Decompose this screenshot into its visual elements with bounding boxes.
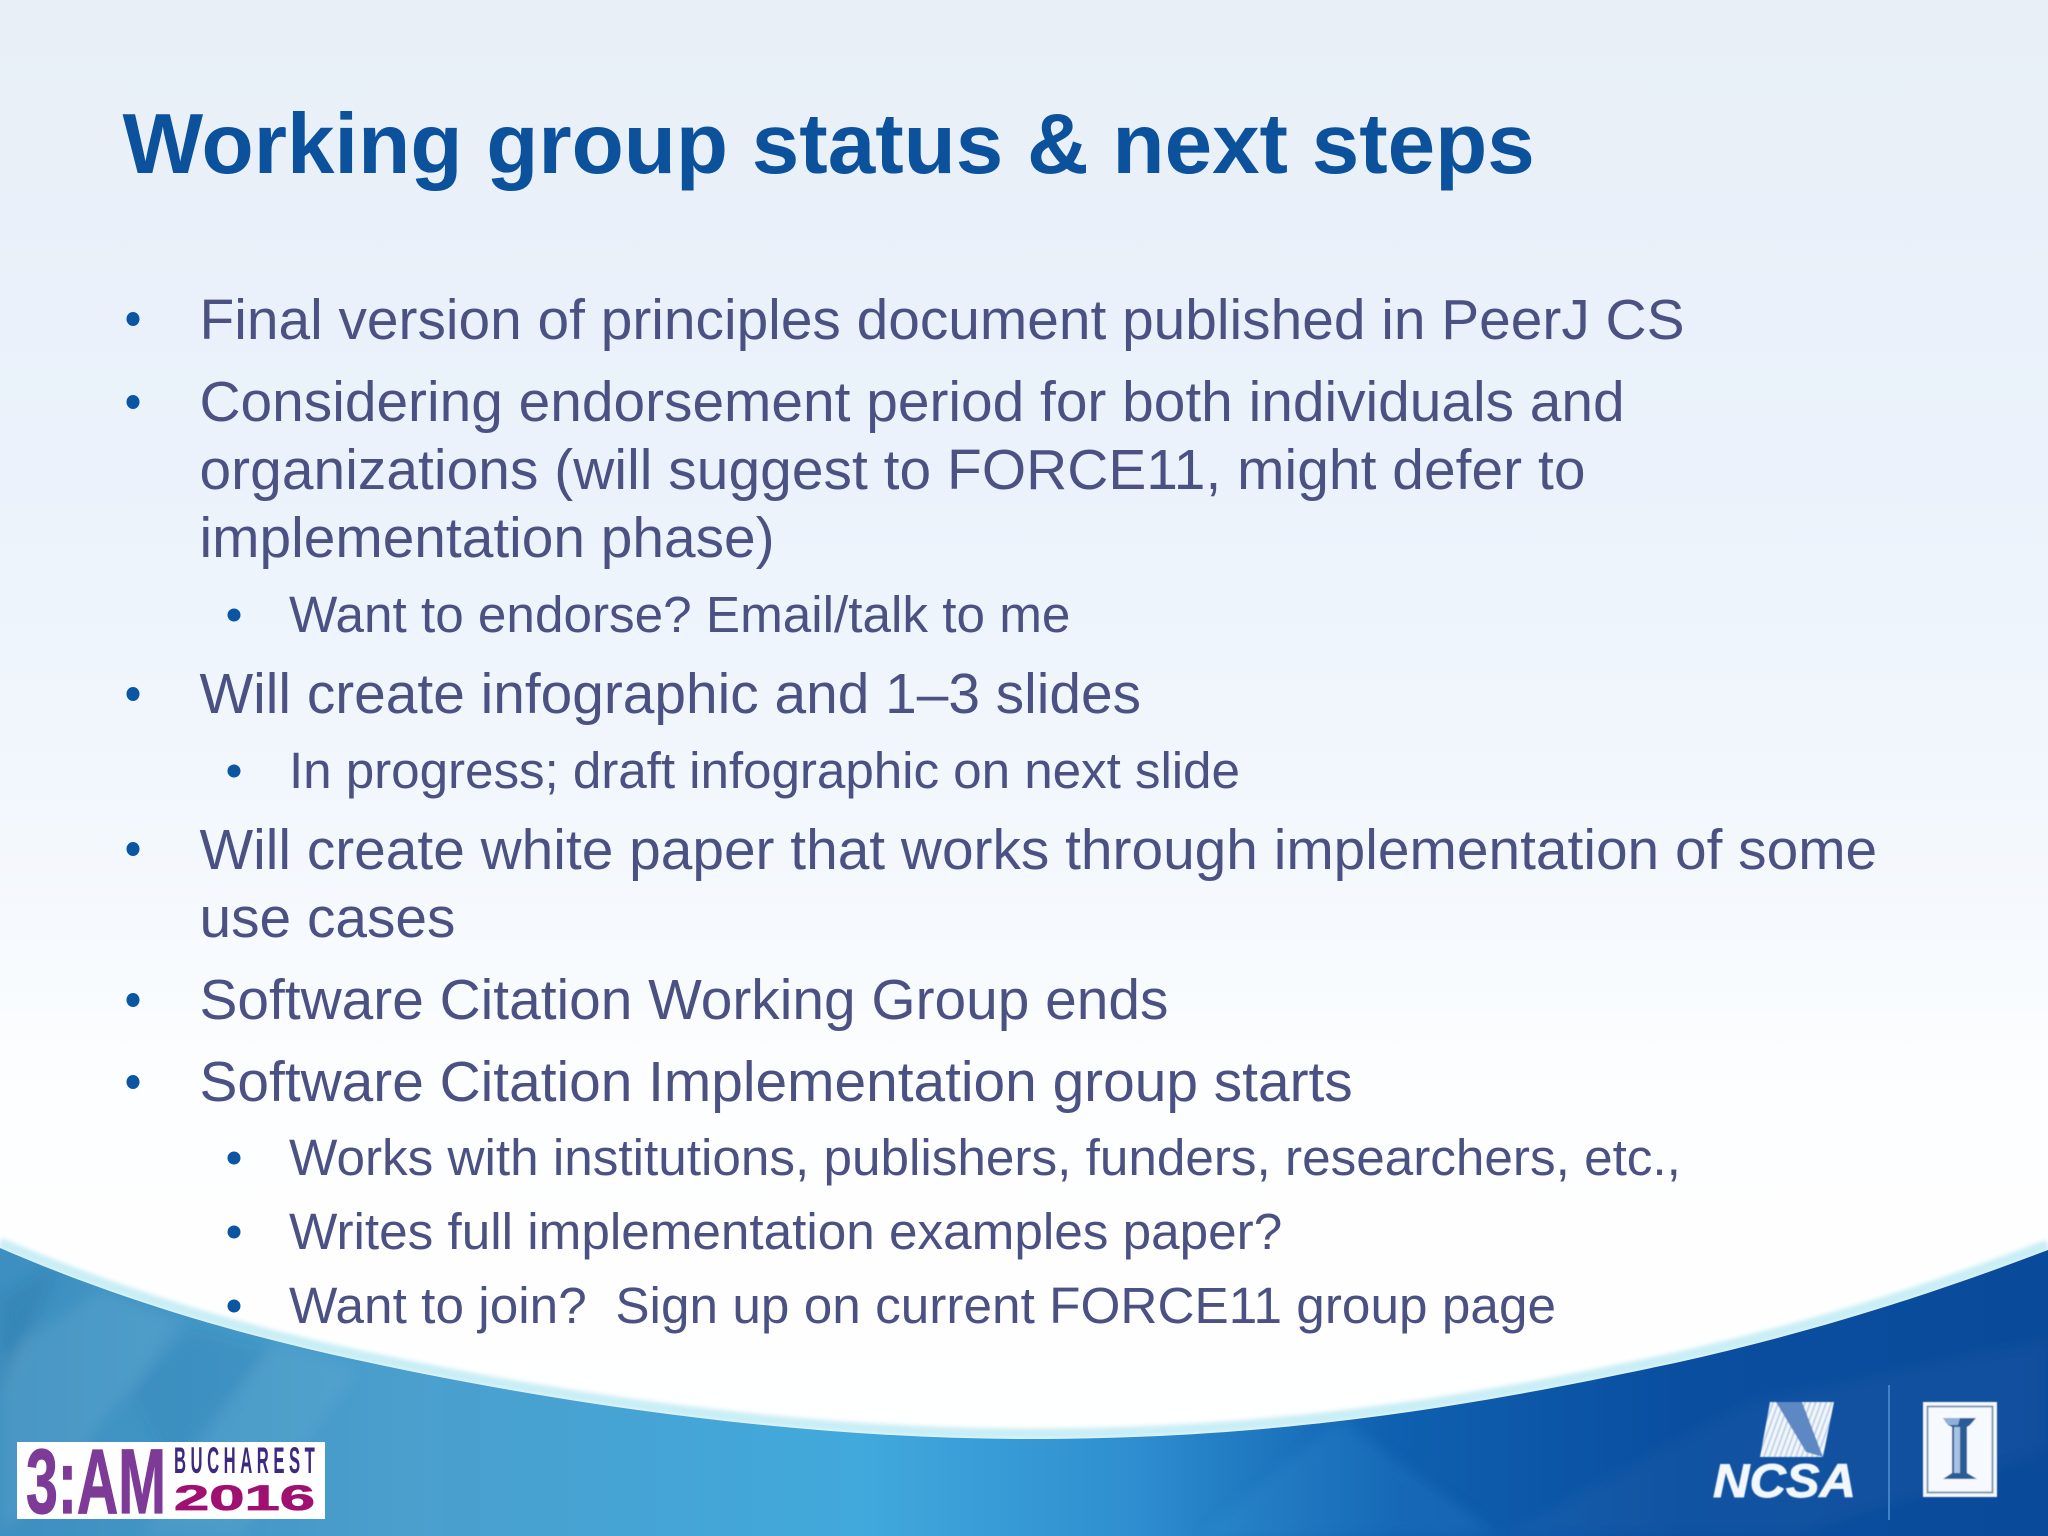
- sub-bullet: in progress: In progress; draft infographic on next slide: [289, 742, 1240, 799]
- bullet: white paper: Will create white paper that works through implementation of some: [200, 819, 1877, 882]
- logo: NCSA: [1713, 1402, 1856, 1507]
- divider between logos: [1888, 1385, 1890, 1520]
- bullet list: [126, 289, 1877, 1334]
- logo: Illinois I: [1923, 1402, 1997, 1497]
- bullet: infographic: Will create infographic and 1–3 slides: [200, 663, 1141, 726]
- bullet: implementation group starts: Software Citation Implementation group starts: [200, 1051, 1353, 1114]
- bullet: endorsement period: implementation phase): [200, 507, 775, 570]
- sub-bullet: want to endorse: Want to endorse? Email/talk to me: [289, 586, 1070, 643]
- footer wave band: [0, 1240, 2048, 1536]
- logo: NCSA: NCSA: [1713, 1454, 1856, 1507]
- sub-bullet: want to join: Want to join? Sign up on current FORCE11 group page: [289, 1277, 1556, 1334]
- bullet: working group ends: Software Citation Working Group ends: [200, 969, 1168, 1032]
- title: Working group status & next steps: [122, 97, 1535, 192]
- sub-bullet: implementation examples: Writes full implementation examples paper?: [289, 1203, 1282, 1260]
- bullet: endorsement period: Considering endorsement period for both individuals and: [200, 371, 1625, 434]
- bullet: endorsement period: [126, 371, 1625, 570]
- bullet: white paper: [126, 819, 1877, 950]
- bullet: endorsement period: organizations (will suggest to FORCE11, might defer to: [200, 439, 1586, 502]
- logo: 3:AM Bucharest 2016: 2016: [174, 1479, 315, 1518]
- bullet: final version: Final version of principles document published in PeerJ CS: [200, 289, 1685, 352]
- logo: 3:AM Bucharest 2016: 3:AM: [26, 1431, 166, 1533]
- bullet: white paper: use cases: [200, 887, 455, 950]
- logo: 3:AM Bucharest 2016: BUCHAREST: [174, 1441, 319, 1482]
- sub-bullet: works with institutions: Works with institutions, publishers, funders, researchers, etc.,: [289, 1129, 1681, 1186]
